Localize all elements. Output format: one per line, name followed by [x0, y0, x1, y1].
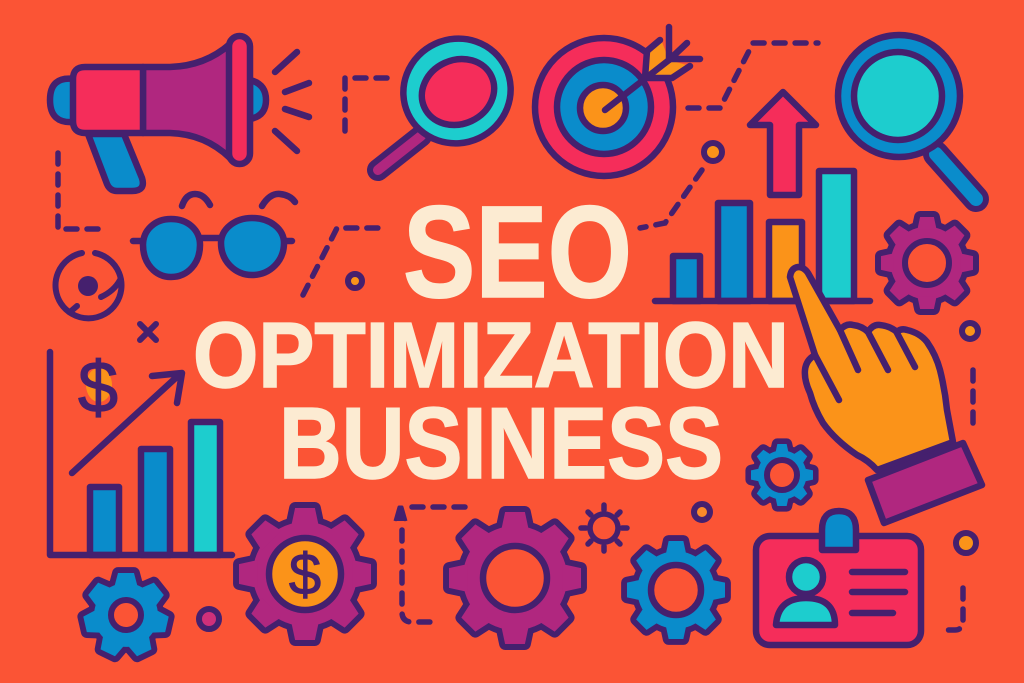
icon: large magnifier: [838, 35, 976, 199]
up arrow: [750, 92, 816, 195]
icon: blue gear: [627, 541, 725, 639]
megaphone front cap: [250, 80, 266, 119]
icon: small magnifier: [378, 21, 528, 170]
chart: bars with rising arrow: [655, 92, 870, 301]
title line: SEO: SEO: [403, 178, 632, 325]
megaphone rim: [229, 36, 250, 164]
icon: megaphone: [50, 36, 266, 191]
icon: pointing hand: [790, 267, 982, 523]
small arrow tip on bracket: [395, 507, 406, 521]
icon: megaphone rays: [275, 52, 309, 151]
icon: gear bottom left: [83, 573, 169, 658]
decorative dot: [962, 323, 978, 339]
hand cuff: [868, 443, 982, 523]
icon: glasses: [133, 194, 295, 277]
icon: gear top right: [881, 217, 973, 309]
decorative dot: [199, 609, 219, 629]
icon: orbit circle: [56, 253, 122, 318]
decorative cross: [140, 324, 156, 340]
icon: target: [535, 27, 700, 176]
icon: dollar gear: [239, 508, 371, 640]
title line: OPTIMIZATION: OPTIMIZATION: [193, 303, 789, 407]
decorative dot: [704, 143, 722, 161]
title line: BUSINESS: BUSINESS: [279, 388, 723, 500]
connector lines: [58, 43, 973, 630]
megaphone back cap: [50, 79, 74, 122]
title: [193, 178, 789, 500]
icon: center gear: [449, 512, 581, 644]
icon: id badge: [756, 511, 921, 645]
decorative dot: [694, 504, 710, 520]
icon: tiny gear: [581, 505, 627, 551]
decorative dot: [348, 274, 362, 288]
megaphone cone: [143, 44, 230, 158]
megaphone body: [73, 67, 143, 133]
icon: gear blue small: [751, 444, 813, 506]
arrow fletching: [648, 42, 669, 78]
icon: dollar gear: $: [289, 542, 321, 607]
chart: left growth bars: [50, 352, 232, 555]
decorative dot: [956, 533, 976, 553]
icon: dollar sign: $: [78, 348, 118, 428]
megaphone handle: [88, 134, 143, 191]
